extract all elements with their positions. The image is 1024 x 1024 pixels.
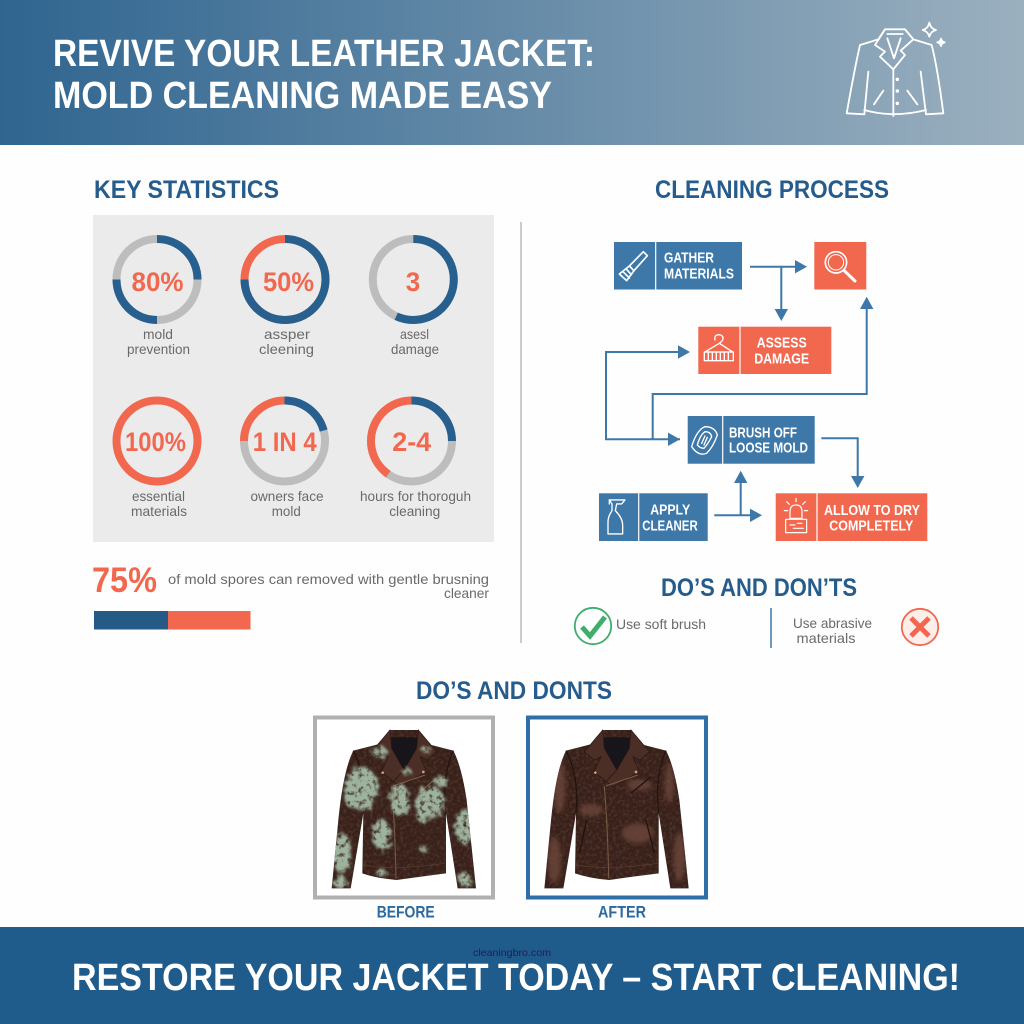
stat: 3 damage: damage [391, 341, 439, 357]
icon: magnifier [825, 252, 855, 281]
stat: 80% mold prevention: prevention [127, 341, 190, 357]
step: inspect icon box [814, 242, 866, 290]
panel: after jacket [528, 718, 706, 898]
step: assess damage [698, 327, 831, 374]
label: before: BEFORE [377, 902, 435, 922]
stat: 50% cleaning: cleening [259, 341, 314, 357]
arrow: apply to brush [734, 471, 747, 515]
step: allow to dry completely: ALLOW TO DRY [824, 502, 920, 519]
icon: jacket with sparkles [847, 23, 945, 116]
stat: 1 in 4 owners face mold [244, 400, 325, 519]
panel: before jacket [315, 718, 493, 898]
icon: red cross [902, 609, 938, 645]
progress bar [94, 611, 250, 630]
step: brush off loose mold: BRUSH OFF [729, 424, 797, 441]
step: gather materials: GATHER [664, 250, 714, 267]
stat: 80% mold prevention: mold [143, 326, 173, 342]
title: REVIVE YOUR LEATHER JACKET: [53, 33, 595, 75]
heading: do's and don'ts: DO’S AND DON’TS [661, 574, 857, 602]
icon: sponge [692, 427, 717, 454]
stat: 3 damage [373, 239, 454, 357]
step: gather materials [614, 242, 742, 290]
footer banner [0, 927, 1024, 1024]
flowchart: cleaning process [599, 242, 927, 541]
step: gather materials: MATERIALS [664, 266, 734, 283]
step: apply cleaner: APPLY [650, 502, 690, 519]
callout: 75% mold spores: 75% [92, 561, 157, 600]
step: allow to dry completely [776, 493, 927, 541]
stat: 100% essential materials [116, 400, 198, 519]
stat: 100% essential materials: materials [131, 503, 187, 519]
arrow: materials to assess [775, 267, 788, 321]
stat: 50% cleaning [244, 239, 326, 357]
heading: key statistics: KEY STATISTICS [94, 176, 279, 204]
icon: hanger brush [704, 335, 733, 361]
stat: 2-4 hours: cleaning [389, 503, 440, 519]
watermark: cleaningbro.com [473, 947, 551, 959]
arrow: loop to assess and brush [606, 345, 690, 446]
callout: 75% mold spores: of mold spores can removed with gentle brusning [168, 571, 489, 587]
stat: 2-4 hours [355, 385, 471, 519]
stat: 1 in 4 owners face mold: owners face [250, 488, 324, 504]
stat: 100% essential materials: essential [132, 488, 185, 504]
callout: 75% mold spores [92, 561, 489, 601]
heading: cleaning process: CLEANING PROCESS [655, 176, 889, 204]
step: assess damage: DAMAGE [754, 350, 809, 367]
icon: spray bottle [608, 500, 625, 534]
stat: 2-4 hours: 2-4 [392, 427, 431, 457]
stat: 80% mold prevention [116, 239, 198, 357]
label: after: AFTER [598, 902, 646, 922]
step: brush off loose mold [688, 416, 815, 464]
do: use soft brush: Use soft brush [616, 616, 706, 632]
don't: use abrasive materials: Use abrasive [793, 615, 872, 631]
icon: brush [619, 252, 647, 281]
step: brush off loose mold: LOOSE MOLD [729, 440, 808, 457]
stat: 100% essential materials: 100% [125, 427, 186, 457]
icon: drying jacket and sun [784, 498, 808, 533]
heading: before and after section: DO’S AND DONTS [416, 677, 612, 705]
step: assess damage: ASSESS [757, 334, 807, 351]
stat: 50% cleaning: assper [264, 326, 310, 342]
photo: clean jacket [543, 728, 691, 890]
title: MOLD CLEANING MADE EASY [53, 75, 552, 117]
stat: 50% cleaning: 50% [263, 267, 314, 297]
stat: 3 damage: asesl [400, 326, 429, 342]
title [53, 33, 595, 117]
arrow: materials to search [750, 260, 807, 273]
step: allow to dry completely: COMPLETELY [829, 518, 913, 535]
header banner [0, 0, 1024, 145]
stat: 1 in 4 owners face mold: mold [272, 503, 301, 519]
arrow: brush to dry [821, 438, 864, 488]
photo: moldy jacket [330, 728, 478, 890]
step: apply cleaner: CLEANER [642, 518, 698, 535]
arrow: apply to dry [714, 509, 762, 522]
stat: 1 in 4 owners face mold: 1 IN 4 [253, 427, 317, 457]
stat: 2-4 hours: hours for thoroguh [360, 488, 471, 504]
don't: use abrasive materials: materials [796, 630, 856, 646]
do: use soft brush [575, 608, 706, 644]
don't: use abrasive materials [793, 609, 938, 646]
panel: statistics rings [93, 215, 494, 542]
stat: 80% mold prevention: 80% [132, 267, 184, 297]
arrow: brush to search [653, 297, 873, 439]
stat: 3 damage: 3 [406, 267, 420, 297]
icon: green check [575, 608, 611, 644]
callout: 75% mold spores: cleaner [444, 585, 489, 601]
step: apply cleaner [599, 493, 708, 541]
